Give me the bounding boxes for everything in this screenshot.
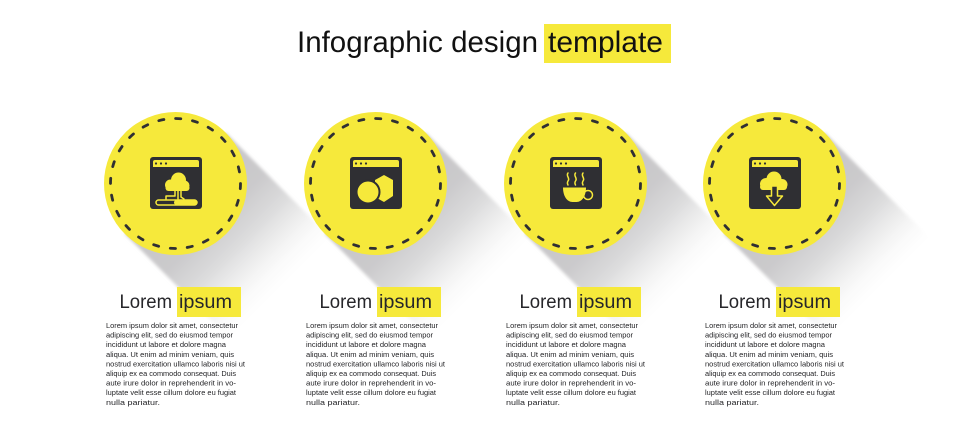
body text: aliquip ex ea commodo consequat. Duis [106,369,236,378]
body text [306,321,446,407]
body text: luptate velit esse cillum dolore eu fugiat [705,388,836,397]
body text: nostrud exercitation ullamco laboris nisi ut [306,359,446,368]
body text: Lorem ipsum dolor sit amet, consectetur [306,321,438,330]
heading: ipsum [778,292,831,313]
body text: aute irure dolor in reprehenderit in vo- [306,379,437,388]
heading: Lorem [520,292,572,313]
body text: luptate velit esse cillum dolore eu fugiat [106,388,237,397]
body text: luptate velit esse cillum dolore eu fugiat [506,388,637,397]
column 2: hexagon and circle [304,112,447,407]
icon: browser window with steaming cup [550,157,602,209]
icon: browser window with shapes [350,157,402,209]
body text: Lorem ipsum dolor sit amet, consectetur [705,321,837,330]
body text: incididunt ut labore et dolore magna [506,340,627,349]
body text: aliquip ex ea commodo consequat. Duis [506,369,636,378]
yellow circle badge [304,112,447,255]
heading [120,287,241,317]
long shadow: column 4 [724,133,935,344]
column 1: cloud tree [104,112,247,407]
icon: browser window with cloud download [749,157,801,209]
body text: luptate velit esse cillum dolore eu fugiat [306,388,437,397]
body text: nulla pariatur. [106,398,160,407]
heading [718,287,840,317]
yellow circle badge [504,112,647,255]
body text: nostrud exercitation ullamco laboris nisi ut [506,359,646,368]
heading [520,287,641,317]
long shadow: column 1 [125,133,336,344]
body text: aliquip ex ea commodo consequat. Duis [705,369,835,378]
heading: ipsum [379,292,432,313]
heading: ipsum [579,292,632,313]
long shadow: column 2 [325,133,536,344]
heading: Lorem [718,292,771,313]
heading: ipsum [179,292,232,313]
long shadow: column 3 [525,133,736,344]
body text: aliqua. Ut enim ad minim veniam, quis [306,350,434,359]
yellow circle badge [104,112,247,255]
body text [506,321,646,407]
body text: nulla pariatur. [705,398,759,407]
body text: nostrud exercitation ullamco laboris nisi ut [705,359,845,368]
heading: Lorem [320,292,372,313]
column 4: cloud download [703,112,846,407]
column 3: coffee cup [504,112,647,407]
body text [705,321,845,407]
body text: Lorem ipsum dolor sit amet, consectetur [506,321,638,330]
body text: aliqua. Ut enim ad minim veniam, quis [705,350,833,359]
body text: nostrud exercitation ullamco laboris nisi ut [106,359,246,368]
body text: nulla pariatur. [306,398,360,407]
title: template [548,26,663,59]
title [297,24,671,63]
body text: aute irure dolor in reprehenderit in vo- [106,379,237,388]
body text: aute irure dolor in reprehenderit in vo- [705,379,836,388]
body text: aliqua. Ut enim ad minim veniam, quis [106,350,234,359]
body text: adipiscing elit, sed do eiusmod tempor [306,331,433,340]
body text: nulla pariatur. [506,398,560,407]
title: Infographic design [297,26,538,59]
heading [320,287,441,317]
body text: aliquip ex ea commodo consequat. Duis [306,369,436,378]
body text: incididunt ut labore et dolore magna [705,340,826,349]
body text: incididunt ut labore et dolore magna [306,340,427,349]
body text: incididunt ut labore et dolore magna [106,340,227,349]
body text [106,321,246,407]
icon: browser window with cloud network [150,157,202,209]
heading: Lorem [120,292,172,313]
body text: adipiscing elit, sed do eiusmod tempor [705,331,832,340]
body text: aliqua. Ut enim ad minim veniam, quis [506,350,634,359]
body text: adipiscing elit, sed do eiusmod tempor [106,331,233,340]
body text: aute irure dolor in reprehenderit in vo- [506,379,637,388]
body text: adipiscing elit, sed do eiusmod tempor [506,331,633,340]
body text: Lorem ipsum dolor sit amet, consectetur [106,321,238,330]
yellow circle badge [703,112,846,255]
